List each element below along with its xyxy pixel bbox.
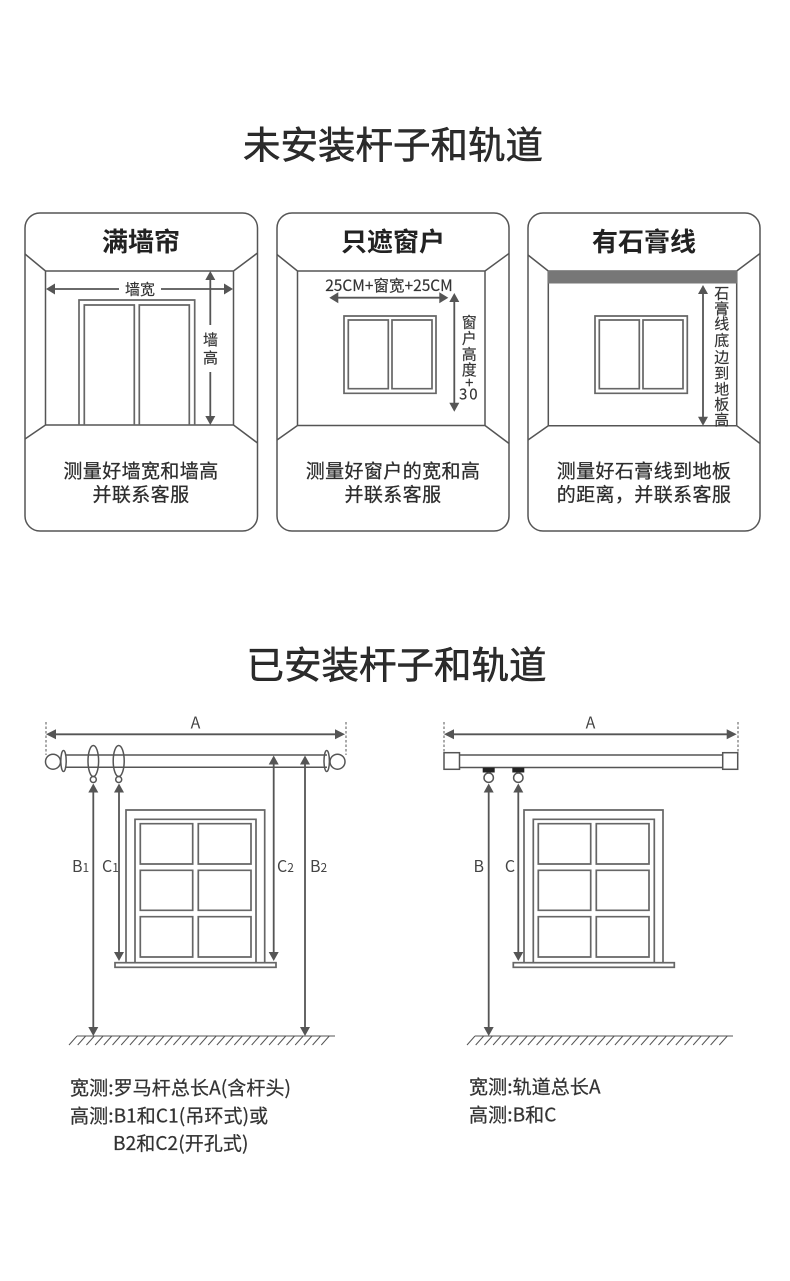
height arrow: 地: [714, 378, 729, 400]
height arrow: [449, 293, 480, 412]
card outline: [277, 213, 509, 531]
height arrow: 边: [714, 346, 729, 368]
height arrow: 窗: [462, 312, 477, 332]
room perspective: [528, 254, 760, 444]
measuring note: 宽测:罗马杆总长A(含杆头): [70, 1074, 291, 1100]
width arrow: 25CM+窗宽+25CM: [325, 274, 453, 296]
panel title: 满墙帘: [102, 222, 180, 259]
dimension B2: B2: [310, 853, 328, 877]
panel: window only: [277, 213, 509, 531]
dimension B: [473, 784, 494, 1036]
dimension B1: B1: [72, 853, 89, 877]
card outline: [528, 213, 760, 531]
wall height arrow: 墙: [203, 329, 218, 350]
measuring note: 高测:B1和C1(吊环式)或: [70, 1102, 268, 1128]
panel: full wall curtain: [25, 213, 258, 531]
diagram: track: [444, 710, 738, 1128]
height arrow: 高: [714, 409, 729, 430]
wall width arrow: 墙宽: [125, 278, 155, 300]
panel caption: [306, 456, 480, 507]
height arrow: 膏: [714, 298, 729, 319]
height arrow: 度: [462, 359, 477, 380]
height arrow: 板: [714, 394, 729, 414]
height arrow: 户: [462, 328, 477, 348]
width dimension A: [46, 710, 346, 755]
wall width arrow: [46, 278, 233, 300]
panel title: 只遮窗户: [341, 222, 445, 259]
measuring note: [469, 1072, 601, 1128]
dimension C2: C2: [277, 853, 294, 877]
panel caption: 并联系客服: [344, 480, 442, 507]
panel caption: 测量好墙宽和墙高: [63, 456, 219, 484]
height arrow: 底: [714, 330, 729, 350]
track with end caps: [444, 753, 738, 769]
dimension B2: [300, 756, 328, 1036]
dimension C: [505, 784, 523, 961]
panel: with plaster line: [528, 213, 760, 531]
dimension C1: [102, 784, 124, 961]
wall height arrow: 高: [203, 347, 218, 368]
curtain rings: [88, 746, 124, 782]
panel caption: [63, 456, 219, 507]
panel caption: 测量好石膏线到地板: [557, 456, 731, 484]
track sliders: [483, 768, 524, 782]
dimension C1: C1: [102, 853, 119, 877]
measuring note: [70, 1074, 291, 1156]
panel title: 有石膏线: [592, 222, 696, 259]
dimension C2: [269, 756, 294, 961]
window: [595, 316, 687, 393]
dimension C: C: [505, 853, 515, 877]
height arrow: +: [465, 372, 473, 393]
card outline: [25, 213, 258, 531]
window: [115, 810, 276, 967]
wall height arrow: [203, 271, 218, 425]
dimension B: B: [473, 853, 484, 877]
rod with finials: [46, 750, 345, 772]
panel caption: 并联系客服: [92, 480, 190, 507]
panel caption: [557, 456, 731, 507]
room perspective: [25, 253, 258, 443]
width dimension A: A: [586, 710, 596, 734]
floor: [467, 1036, 733, 1045]
dimension B1: [72, 784, 98, 1036]
window: [513, 810, 674, 967]
panel caption: 测量好窗户的宽和高: [306, 456, 480, 484]
measuring note: B2和C2(开孔式): [113, 1129, 249, 1156]
diagram: roman rod: [46, 710, 346, 1156]
height arrow: [698, 282, 729, 430]
heading: not installed: 未安装杆子和轨道: [243, 114, 543, 170]
floor: [69, 1036, 335, 1045]
door: [79, 300, 195, 425]
height arrow: 30: [459, 384, 480, 404]
height arrow: 石: [714, 282, 729, 304]
room perspective: [277, 254, 509, 444]
plaster line band: [548, 270, 737, 284]
panel caption: 的距离，并联系客服: [557, 480, 731, 507]
width dimension A: [444, 710, 738, 755]
height arrow: 高: [462, 344, 477, 364]
heading: installed: 已安装杆子和轨道: [246, 634, 546, 690]
window: [344, 316, 436, 393]
width dimension A: A: [191, 710, 201, 734]
measuring note: 宽测:轨道总长A: [469, 1072, 601, 1100]
height arrow: 到: [714, 362, 729, 384]
measuring note: 高测:B和C: [469, 1100, 556, 1128]
height arrow: 线: [714, 313, 729, 334]
